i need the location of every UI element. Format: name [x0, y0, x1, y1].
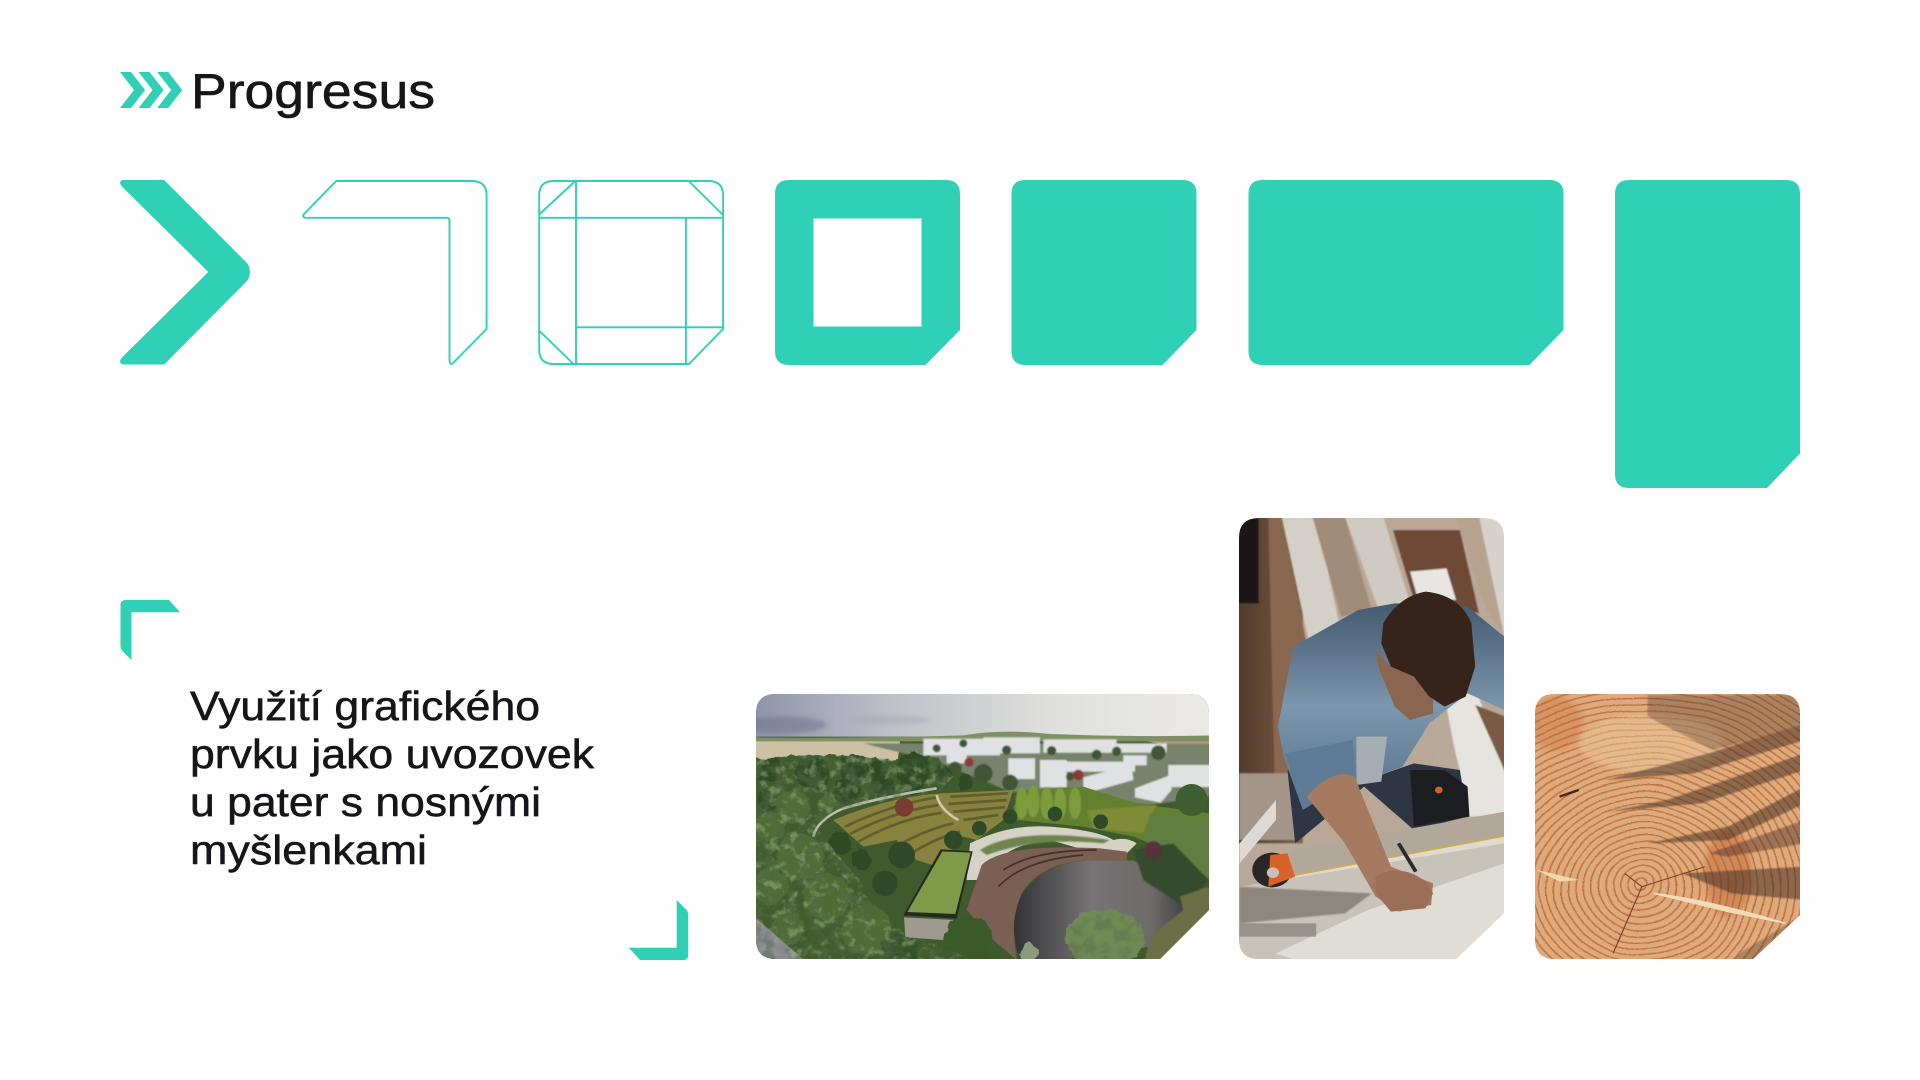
- workshop background: [1239, 518, 1504, 959]
- growth rings: [1535, 694, 1800, 959]
- icon: solid portrait shape: [1615, 180, 1800, 488]
- worker body: [1287, 763, 1468, 843]
- plaza and deck: [967, 826, 1137, 880]
- icon: outline corner element: [303, 181, 487, 364]
- opening bracket: [120, 600, 180, 660]
- photo: wood cross-section with shadow: [1535, 694, 1800, 959]
- logo wordmark: Progresus: [191, 65, 435, 119]
- forearm and hand: [1307, 774, 1433, 912]
- icon: frame shape with square hole: [775, 180, 960, 365]
- workbench: [1291, 812, 1504, 873]
- icon: triple chevron: [120, 72, 182, 108]
- icon: solid landscape shape: [1248, 180, 1564, 365]
- icon: solid square shape: [1012, 180, 1196, 365]
- forest: [750, 753, 973, 967]
- pond: [1014, 861, 1187, 960]
- photo: aerial view of park with pond: [756, 694, 1209, 959]
- quote block: [120, 600, 688, 960]
- orchards: [833, 790, 1013, 867]
- quote text: Využití grafického: [190, 683, 540, 729]
- graphic element row: [120, 180, 1800, 488]
- icon: large solid chevron: [120, 180, 250, 364]
- foliage texture: [756, 755, 961, 959]
- icon: construction grid: [539, 181, 723, 364]
- leaf shadows: [1605, 695, 1805, 967]
- quote text: myšlenkami: [190, 827, 427, 873]
- tape measure: [1252, 853, 1292, 887]
- quote text: prvku jako uvozovek: [190, 731, 595, 777]
- photo: carpenter drawing plans: [1239, 518, 1504, 959]
- closing bracket: [629, 900, 688, 960]
- town: [863, 737, 1217, 805]
- quote text: u pater s nosnými: [190, 779, 541, 825]
- logo: Progresus: [120, 65, 435, 119]
- cracks: [1537, 870, 1579, 882]
- foreground trees: [880, 908, 1145, 959]
- head: [1375, 650, 1433, 720]
- green roof building: [903, 849, 973, 919]
